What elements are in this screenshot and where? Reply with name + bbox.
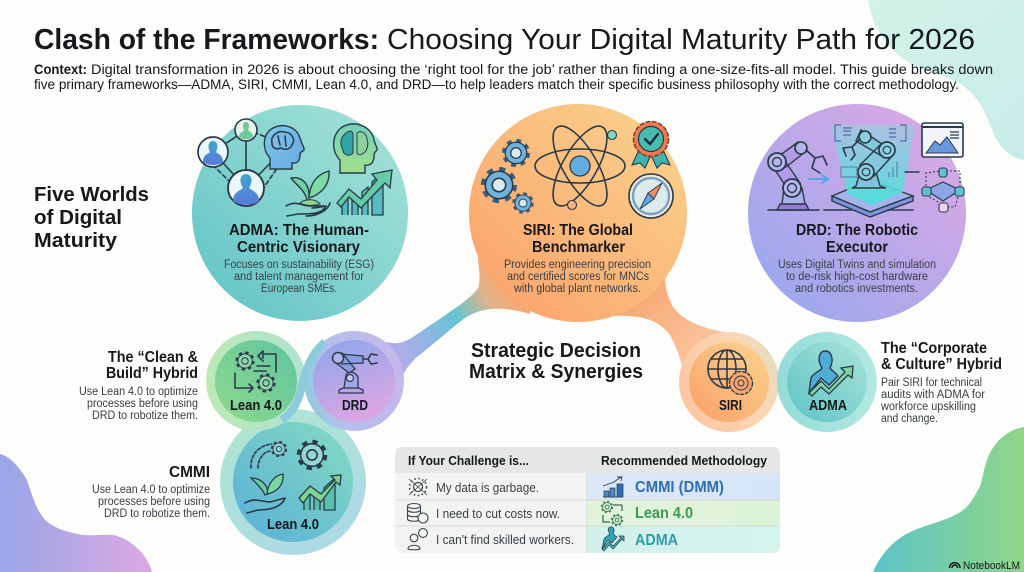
text: ADMA description: European SMEs. (261, 283, 337, 295)
context paragraph: Digital transformation in 2026 is about choosing the ‘right tool for the job’ rather than finding a one-size-fits-all model. This guide breaks down (91, 62, 993, 77)
icon: growth chart (337, 170, 392, 215)
icon: head with brain, green (334, 124, 377, 173)
text: clean and build hybrid: DRD to robotize them. (92, 410, 198, 422)
heading: strategic decision matrix (469, 340, 643, 383)
title: Choosing Your Digital Maturity Path for 2026 (387, 24, 975, 56)
context paragraph: five primary frameworks—ADMA, SIRI, CMMI, Lean 4.0, and DRD—to help leaders match their specific business philosophy with the correct methodology. (34, 77, 959, 92)
recommendation row: Lean (587, 500, 780, 526)
node: DRD small (282, 331, 404, 431)
text: DRD description: Uses Digital Twins and simulation (778, 259, 936, 271)
text: DRD description: to de-risk high-cost hardware (786, 271, 928, 283)
icon: medal (632, 122, 670, 168)
text: label: Lean 4.0 (267, 517, 319, 533)
table header text: If Your Challenge is... (408, 453, 529, 468)
node: Lean 4.0 small (206, 331, 306, 431)
icon: gears (484, 141, 532, 212)
icon: coins (408, 504, 428, 523)
node: ADMA small (777, 332, 877, 432)
text: corporate and culture hybrid: & Culture” Hybrid (881, 356, 1002, 373)
context paragraph (34, 62, 993, 92)
text: corporate and culture hybrid: workforce upskilling (880, 401, 976, 413)
heading: five worlds: Five Worlds (34, 183, 149, 206)
table header text (408, 453, 768, 468)
text: ADMA description (224, 259, 374, 295)
icon: dashboard window (922, 123, 963, 157)
icon: green gears (602, 502, 622, 525)
context paragraph: Context: (34, 62, 87, 77)
text: challenge one: My data is garbage. (436, 480, 539, 495)
text: recommendation ADMA: ADMA (635, 532, 678, 549)
text: recommendation Lean: Lean 4.0 (635, 505, 693, 522)
text: challenge two: I need to cut costs now. (436, 506, 560, 521)
recommendation row: CMMI (587, 473, 780, 500)
text: CMMI note (92, 464, 210, 520)
decorative corner: bottom right (873, 427, 1024, 572)
panel: SIRI circle (469, 104, 687, 322)
decorative corner: top right (868, 0, 1024, 160)
heading: strategic decision matrix: Matrix & Synergies (469, 361, 643, 383)
text: DRD description (778, 259, 936, 295)
text: CMMI note: DRD to robotize them. (104, 508, 210, 520)
icon: data cluster (409, 478, 427, 496)
text: clean and build hybrid: The “Clean & (108, 349, 198, 366)
heading: five worlds: Maturity (34, 229, 118, 252)
icon: physical robot arm (768, 142, 827, 210)
icon: transfer arrow (809, 175, 828, 183)
text: corporate and culture hybrid: and change. (881, 413, 938, 425)
icon: person with question (408, 529, 427, 550)
icon: bar chart up (603, 477, 623, 497)
text: corporate and culture hybrid: audits with ADMA for (881, 389, 985, 401)
node: CMMI Lean 4.0 large (220, 409, 366, 555)
text: CMMI note: CMMI (169, 464, 210, 481)
text: recommendation CMMI: CMMI (DMM) (635, 479, 724, 496)
table: decision matrix (395, 447, 780, 553)
table header text: Recommended Methodology (601, 453, 768, 468)
text: DRD title: DRD: The Robotic (796, 222, 918, 239)
text: corporate and culture hybrid (880, 340, 1002, 425)
icon: atom (535, 119, 625, 213)
text: clean and build hybrid: Build” Hybrid (106, 365, 198, 382)
text: SIRI description: with global plant networks. (513, 283, 641, 295)
icon: compass gauge (629, 174, 673, 218)
icon: data network (922, 168, 964, 212)
icon: digital twin platform (824, 125, 919, 217)
text: DRD title: Executor (826, 239, 888, 256)
icon: robot arm (332, 352, 377, 393)
text: ADMA title: ADMA: The Human- (229, 222, 369, 239)
text: CMMI note: processes before using (98, 496, 210, 508)
connector: SIRI to DRD band (365, 250, 530, 392)
icon: teal person arrow (602, 527, 624, 551)
recommendation row: ADMA (587, 526, 780, 553)
heading: five worlds (34, 183, 149, 252)
icon: person with arrow (809, 351, 853, 396)
text: corporate and culture hybrid: Pair SIRI for technical (881, 377, 982, 389)
connector: SIRI to hybrid band (610, 250, 725, 388)
text: SIRI title: SIRI: The Global (523, 222, 633, 239)
heading: five worlds: of Digital (34, 206, 122, 229)
text: ADMA title: Centric Visionary (237, 239, 360, 256)
text: corporate and culture hybrid: The “Corporate (881, 340, 987, 357)
text: ADMA title (229, 222, 369, 256)
text: label: SIRI (719, 398, 742, 414)
icon: connected people (198, 119, 283, 206)
heading: strategic decision matrix: Strategic Decision (471, 340, 641, 362)
text: label: DRD (342, 398, 368, 414)
text: SIRI description: Provides engineering precision (504, 259, 651, 271)
text: SIRI title (523, 222, 633, 256)
badge: NotebookLM: NotebookLM (963, 560, 1020, 572)
text: CMMI note: Use Lean 4.0 to optimize (92, 484, 210, 496)
icon: globe and badge (708, 350, 752, 394)
text: SIRI title: Benchmarker (532, 239, 625, 256)
text: clean and build hybrid (79, 349, 198, 422)
text: SIRI description (504, 259, 651, 295)
title (34, 24, 975, 56)
table header row (395, 447, 780, 473)
icon: process gears (235, 351, 276, 392)
text: ADMA description: and talent management for (234, 271, 364, 283)
panel: DRD circle (748, 104, 966, 322)
panel: ADMA circle (192, 105, 408, 321)
text: clean and build hybrid: Use Lean 4.0 to optimize (79, 386, 198, 398)
text: clean and build hybrid: processes before using (87, 398, 198, 410)
decorative corner: bottom left (0, 454, 152, 572)
icon: head with brain, blue (264, 126, 304, 169)
text: label: ADMA (809, 398, 847, 414)
icon: hand with plant (286, 171, 330, 216)
node: SIRI small (679, 332, 779, 432)
text: SIRI description: and certified scores for MNCs (507, 271, 649, 283)
title: Clash of the Frameworks: (34, 24, 379, 56)
text: challenge three: I can't find skilled workers. (436, 532, 574, 547)
text: label: Lean 4.0 (230, 398, 282, 414)
text: DRD description: and robotics investments. (795, 283, 918, 295)
text: DRD title (796, 222, 918, 256)
icon: sprout and gears (245, 442, 341, 513)
text: ADMA description: Focuses on sustainability (ESG) (224, 259, 374, 271)
table body (395, 447, 780, 553)
